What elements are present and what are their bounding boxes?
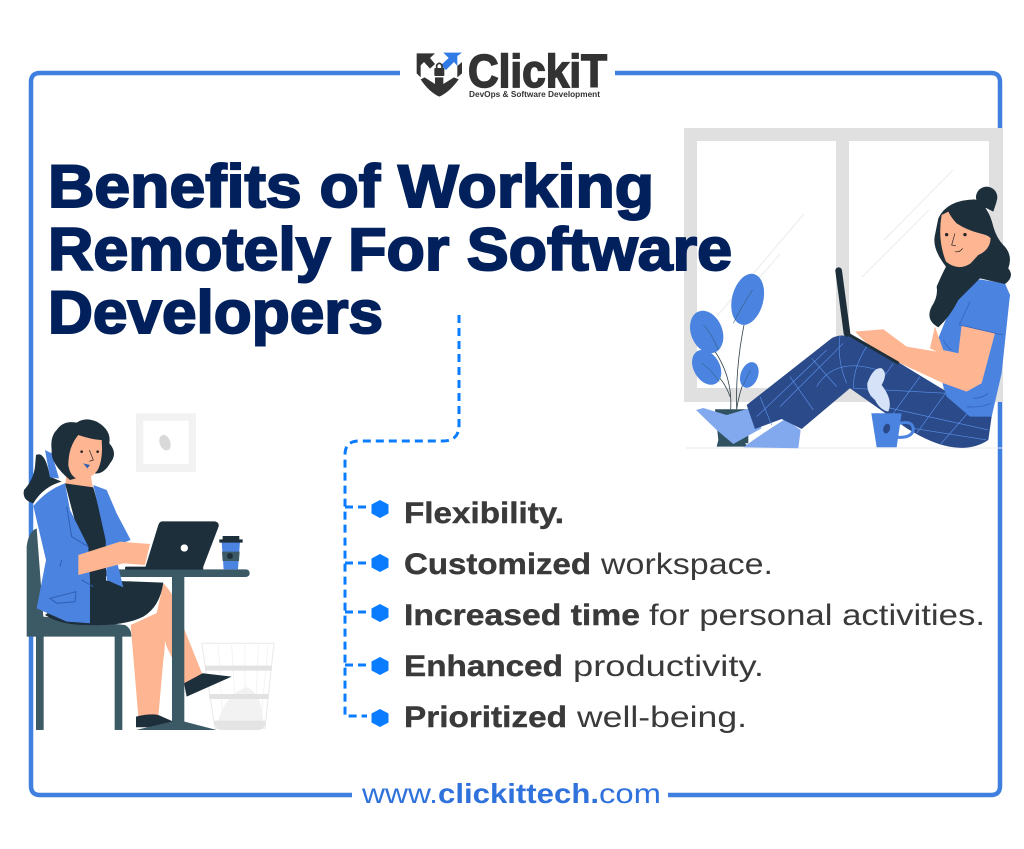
website url bbox=[361, 778, 661, 809]
logo bbox=[417, 45, 607, 99]
title: Developers bbox=[48, 279, 383, 346]
checked trousers bbox=[747, 336, 992, 448]
wastebasket bbox=[202, 643, 274, 730]
illustration: woman sitting with laptop by window bbox=[684, 187, 1011, 448]
benefits list bbox=[372, 497, 985, 734]
plant bbox=[684, 270, 769, 447]
cup with steam bbox=[867, 368, 913, 447]
dashed connector bbox=[345, 315, 459, 716]
item: increased time: Increased time bbox=[404, 599, 640, 632]
item: prioritized well-being bbox=[372, 701, 747, 734]
item: increased time: for personal activities. bbox=[649, 599, 985, 632]
hair bbox=[929, 187, 1011, 327]
hair scrunchie bbox=[45, 450, 59, 478]
item: enhanced productivity: Enhanced bbox=[404, 650, 563, 683]
logo tagline: DevOps & Software Development bbox=[469, 89, 600, 99]
skirt bbox=[45, 580, 163, 625]
laptop bbox=[125, 521, 219, 570]
logo wordmark: ClickiT bbox=[468, 45, 607, 97]
table bbox=[105, 569, 250, 730]
item: prioritized well-being: well-being. bbox=[576, 701, 747, 734]
wall picture bbox=[136, 413, 196, 472]
illustration: window bbox=[684, 128, 1003, 448]
item: increased time bbox=[372, 599, 985, 632]
item: prioritized well-being: Prioritized bbox=[404, 701, 567, 734]
face bbox=[940, 204, 991, 267]
top and neck bbox=[65, 472, 106, 582]
socks bbox=[696, 408, 801, 448]
neck and skin at chest bbox=[952, 265, 968, 300]
hair and face bbox=[51, 419, 114, 480]
logo shield icon bbox=[417, 53, 462, 97]
item: flexibility: Flexibility. bbox=[404, 497, 564, 530]
illustration: woman at cafe table bbox=[24, 413, 274, 730]
title bbox=[48, 153, 732, 346]
item: enhanced productivity bbox=[372, 650, 764, 683]
website url: com bbox=[599, 778, 661, 809]
item: customized workspace: Customized bbox=[404, 548, 591, 581]
chair bbox=[27, 528, 131, 730]
legs and shoes bbox=[131, 583, 232, 727]
item: customized workspace bbox=[372, 548, 773, 581]
hair ponytail bbox=[24, 454, 62, 503]
laptop bbox=[839, 271, 899, 363]
blazer bbox=[33, 483, 131, 623]
arm bbox=[78, 542, 150, 575]
title: Benefits of Working bbox=[48, 153, 654, 220]
coffee cup bbox=[219, 536, 243, 569]
item: enhanced productivity: productivity. bbox=[573, 650, 764, 683]
title: Remotely For Software bbox=[48, 216, 732, 283]
website url: clickittech. bbox=[438, 778, 599, 809]
arm bbox=[855, 285, 1010, 392]
website url: www. bbox=[361, 778, 438, 809]
item: customized workspace: workspace. bbox=[600, 548, 773, 581]
shirt back bbox=[935, 279, 1010, 417]
